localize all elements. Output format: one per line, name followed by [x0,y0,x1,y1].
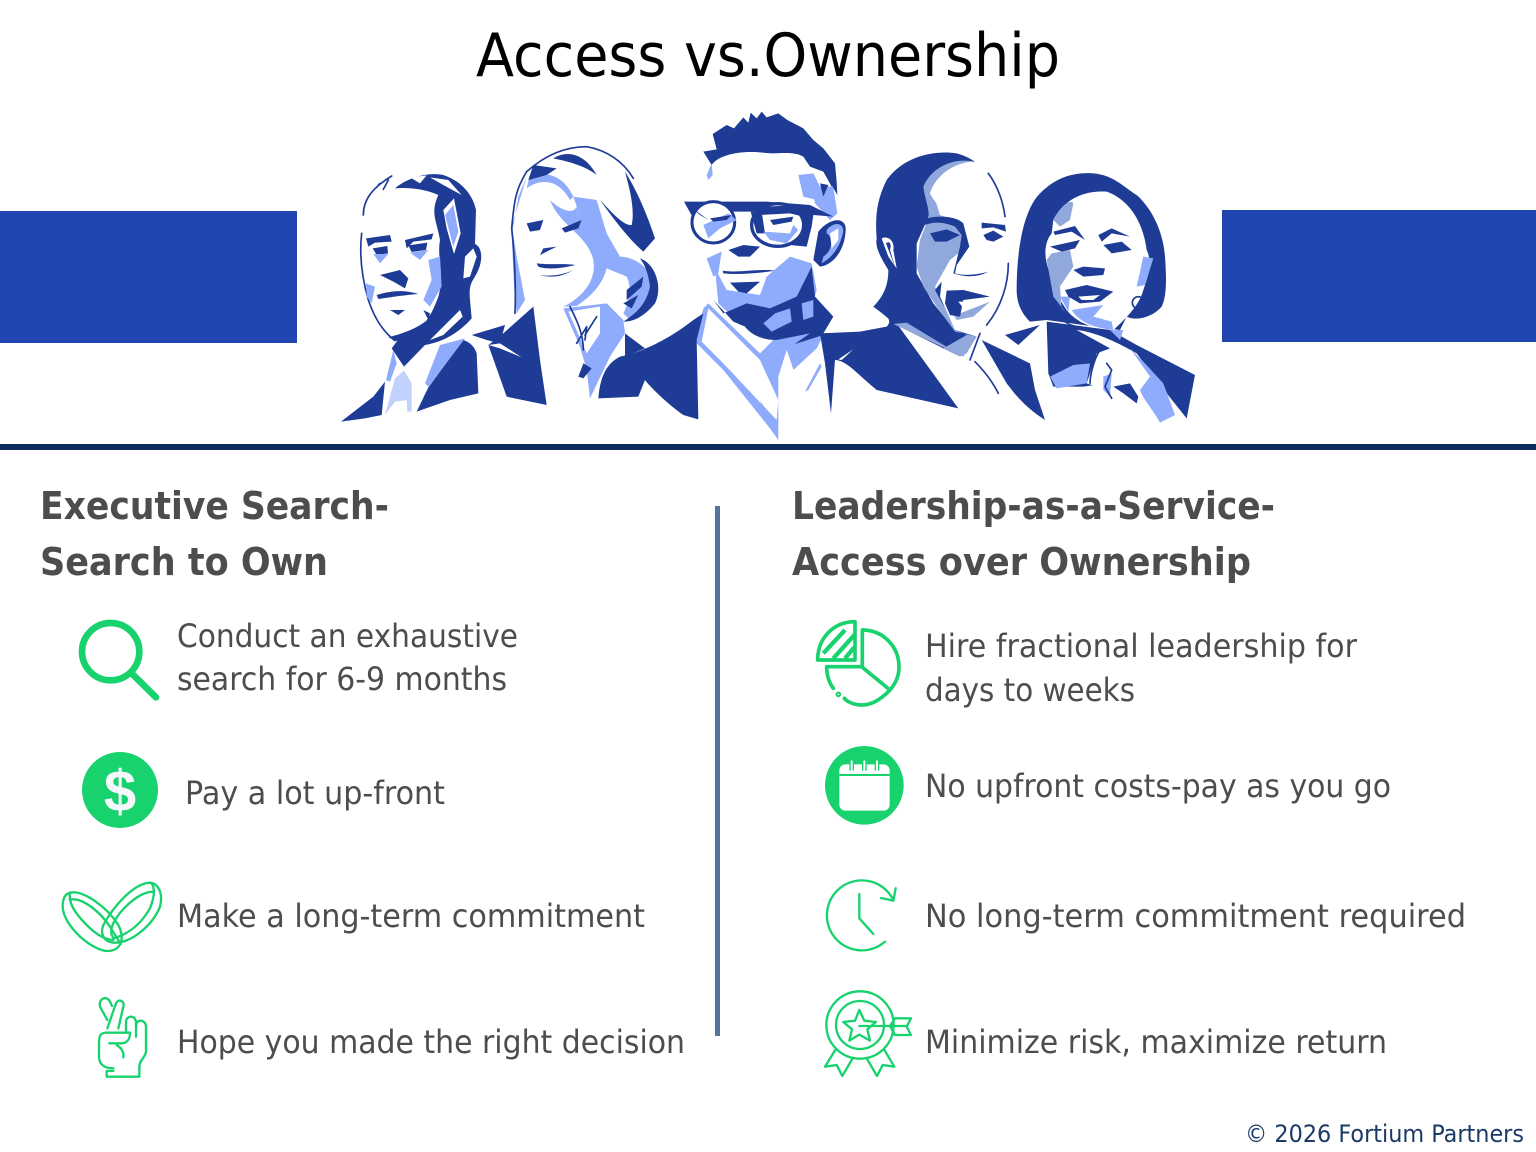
text: minimize risk: Minimize risk, maximize return [925,1023,1387,1061]
icon: crossed fingers [99,998,146,1077]
text: days to weeks: days to weeks [925,671,1135,709]
heading: executive search: Executive Search- [40,484,389,528]
portrait: man with glasses and beard [598,112,846,440]
portrait group illustration [341,112,1195,440]
text: no upfront costs: No upfront costs-pay as you go [925,767,1391,805]
text: no commitment: No long-term commitment required [925,897,1466,935]
copyright: © 2026 Fortium Partners [1245,1120,1524,1148]
icon: calendar [825,746,904,825]
panel: leadership as a service [792,484,1466,1076]
heading: leadership-as-a-service: Leadership-as-a-Service- [792,484,1275,528]
heading: access over ownership: Access over Ownership [792,540,1251,584]
text: long-term commitment: Make a long-term commitment [177,897,645,935]
heading: search to own: Search to Own [40,540,328,584]
icon: clock with arrow [827,880,896,950]
icon: interlocked rings [63,883,161,951]
icon: magnifying glass [82,623,156,697]
horizontal divider [0,444,1536,450]
portrait: bald man [820,153,1045,420]
text: search duration: search for 6-9 months [177,660,507,698]
portrait: man with grey hair [341,174,481,422]
icon: dollar coin: $ [104,759,136,824]
icon: dollar coin [82,752,158,828]
portrait: woman with blonde hair [472,147,658,405]
portrait: woman with bob hair [1005,173,1195,423]
text: pay up-front: Pay a lot up-front [185,774,445,812]
left blue banner [0,211,297,343]
text: hire fractional: Hire fractional leadership for [925,627,1358,665]
vertical divider [715,506,720,1036]
text: exhaustive search: Conduct an exhaustive [177,617,518,655]
title: Access vs.Ownership [476,21,1060,91]
panel: executive search [40,484,685,1077]
right blue banner [1222,210,1536,342]
text: right decision: Hope you made the right decision [177,1023,685,1061]
icon: award target [825,991,911,1076]
icon: pie chart [818,622,899,705]
